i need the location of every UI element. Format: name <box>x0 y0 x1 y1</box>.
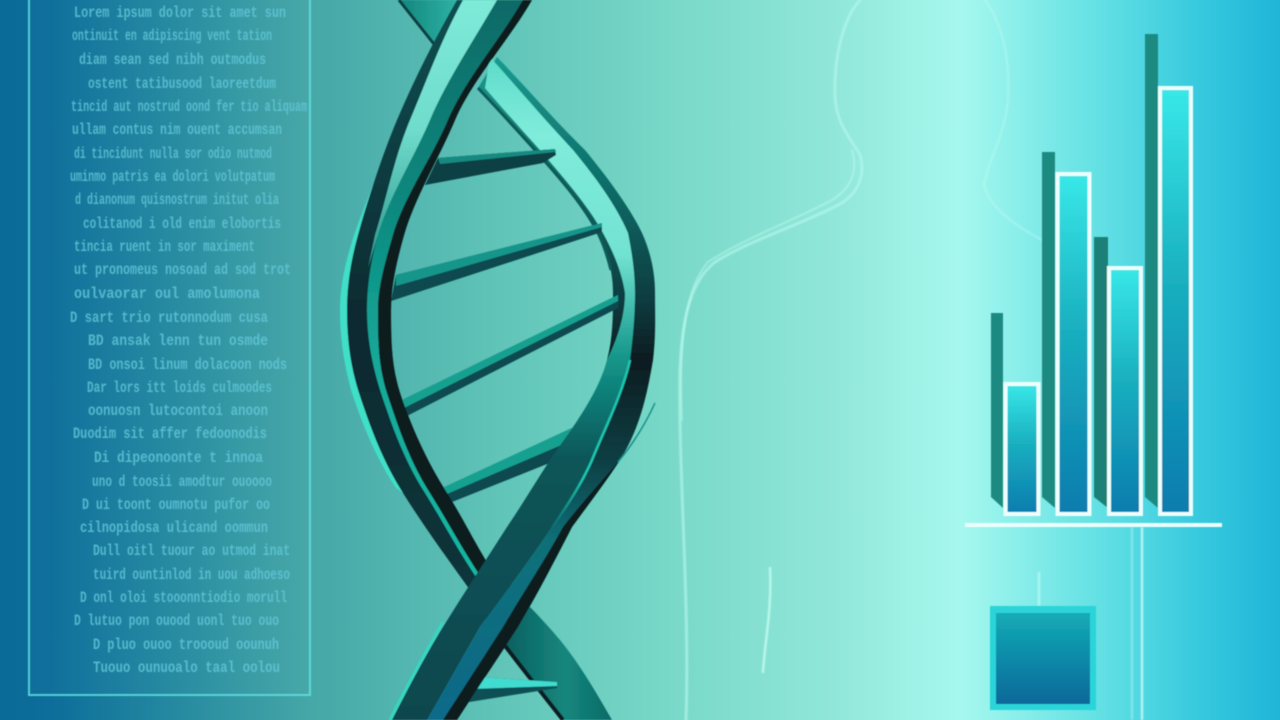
strand one aqua band <box>368 0 497 268</box>
strand two left band <box>392 360 630 720</box>
text block: body copy: BD onsoi linum dolacoon nods <box>88 356 287 374</box>
text block: body copy: D onl oloi stooonntiodio morull <box>80 589 287 607</box>
strand one outer highlight <box>340 155 403 493</box>
strand one teal band <box>367 0 523 590</box>
text block: body copy: Lorem ipsum dolor sit amet sun <box>74 4 286 22</box>
text block: body copy: BD ansak lenn tun osmde <box>88 332 268 350</box>
strand two right band <box>427 360 653 720</box>
text block: body copy: tuird ountinlod in uou adhoeso <box>93 566 290 584</box>
text block: body copy: tincid aut nostrud oond fer tio aliquam <box>71 98 307 116</box>
bar 1 <box>991 313 1038 514</box>
rung 3 <box>396 295 618 419</box>
silhouette left contour <box>680 0 862 720</box>
strand one: lower tail <box>470 570 612 720</box>
strand two black edge <box>443 460 620 720</box>
text block: body copy: ontinuit en adipiscing vent tation <box>72 27 272 45</box>
rung 2 <box>391 223 602 301</box>
rung 5 <box>463 677 557 703</box>
chart baseline <box>965 523 1222 527</box>
text block: body copy: tincia ruent in sor maximent <box>74 238 255 256</box>
text block: body copy: Dull oitl tuour ao utmod inat <box>93 542 290 560</box>
text block: body copy: D lutuo pon ouood uonl tuo ouo <box>74 612 279 630</box>
text block: body copy: ut pronomeus nosoad ad sod trot <box>74 261 291 279</box>
silhouette inner contour <box>681 150 854 420</box>
silhouette arm line <box>763 568 770 672</box>
text block: body copy: D sart trio rutonnodum cusa <box>70 309 268 327</box>
text block: body copy: Duodim sit affer fedoonodis <box>73 425 267 443</box>
bar chart <box>965 34 1222 527</box>
strand one body <box>347 0 532 590</box>
connector left <box>1131 527 1133 720</box>
text block: body copy <box>70 4 307 677</box>
silhouette right contour <box>984 0 1042 240</box>
text block: body copy: di tincidunt nulla sor odio nutmod <box>74 145 272 163</box>
text block: body copy: D ui toont oumnotu pufor oo <box>82 496 270 514</box>
strand one: main curve <box>340 0 532 590</box>
bar 2 <box>1042 152 1090 514</box>
rung 4 <box>436 428 572 504</box>
connector lines below chart <box>1039 527 1142 720</box>
text block: body copy: Tuouo ounuoalo taal oolou <box>93 659 280 677</box>
panel: text column <box>29 0 310 695</box>
bar 3 <box>1094 237 1141 514</box>
strand one black edge <box>378 0 532 590</box>
strand two bright line <box>552 360 630 527</box>
strand two: lower curve <box>390 360 655 720</box>
strand back: top crossing piece <box>398 0 462 44</box>
rung 1 <box>425 149 556 185</box>
text block: body copy: oonuosn lutocontoi anoon <box>88 402 268 420</box>
text block: body copy: ullam contus nim ouent accumsan <box>72 121 282 139</box>
text block: body copy: D pluo ouoo troooud oounuh <box>93 636 279 654</box>
bar 4 <box>1145 34 1191 514</box>
text block: body copy: Dar lors itt loids culmoodes <box>87 379 272 397</box>
strand two left edge glow <box>390 622 443 720</box>
text block: body copy: ostent tatibusood laoreetdum <box>88 75 276 93</box>
text block: body copy: cilnopidosa ulicand oommun <box>80 519 268 537</box>
text block: body copy: colitanod i old enim elobortis <box>83 215 281 233</box>
gradient square <box>990 606 1096 710</box>
panel border <box>29 0 310 695</box>
text block: body copy: diam sean sed nibh outmodus <box>79 51 266 69</box>
text block: body copy: d dianonum quisnostrum initut olia <box>75 191 279 209</box>
DNA double helix <box>340 0 655 720</box>
connector right <box>1141 527 1143 720</box>
text block: body copy: uminmo patris ea dolori volutpatum <box>70 168 275 186</box>
strand two: upper curve <box>478 57 655 360</box>
text block: body copy: Di dipeonoonte t innoa <box>94 449 263 467</box>
human silhouette outline <box>680 0 1042 720</box>
text block: body copy: uno d toosii amodtur ouoooo <box>92 473 272 491</box>
connector to box <box>1038 572 1040 606</box>
strand two trailing sliver <box>618 403 655 462</box>
text block: body copy: oulvaorar oul amolumona <box>74 285 260 303</box>
